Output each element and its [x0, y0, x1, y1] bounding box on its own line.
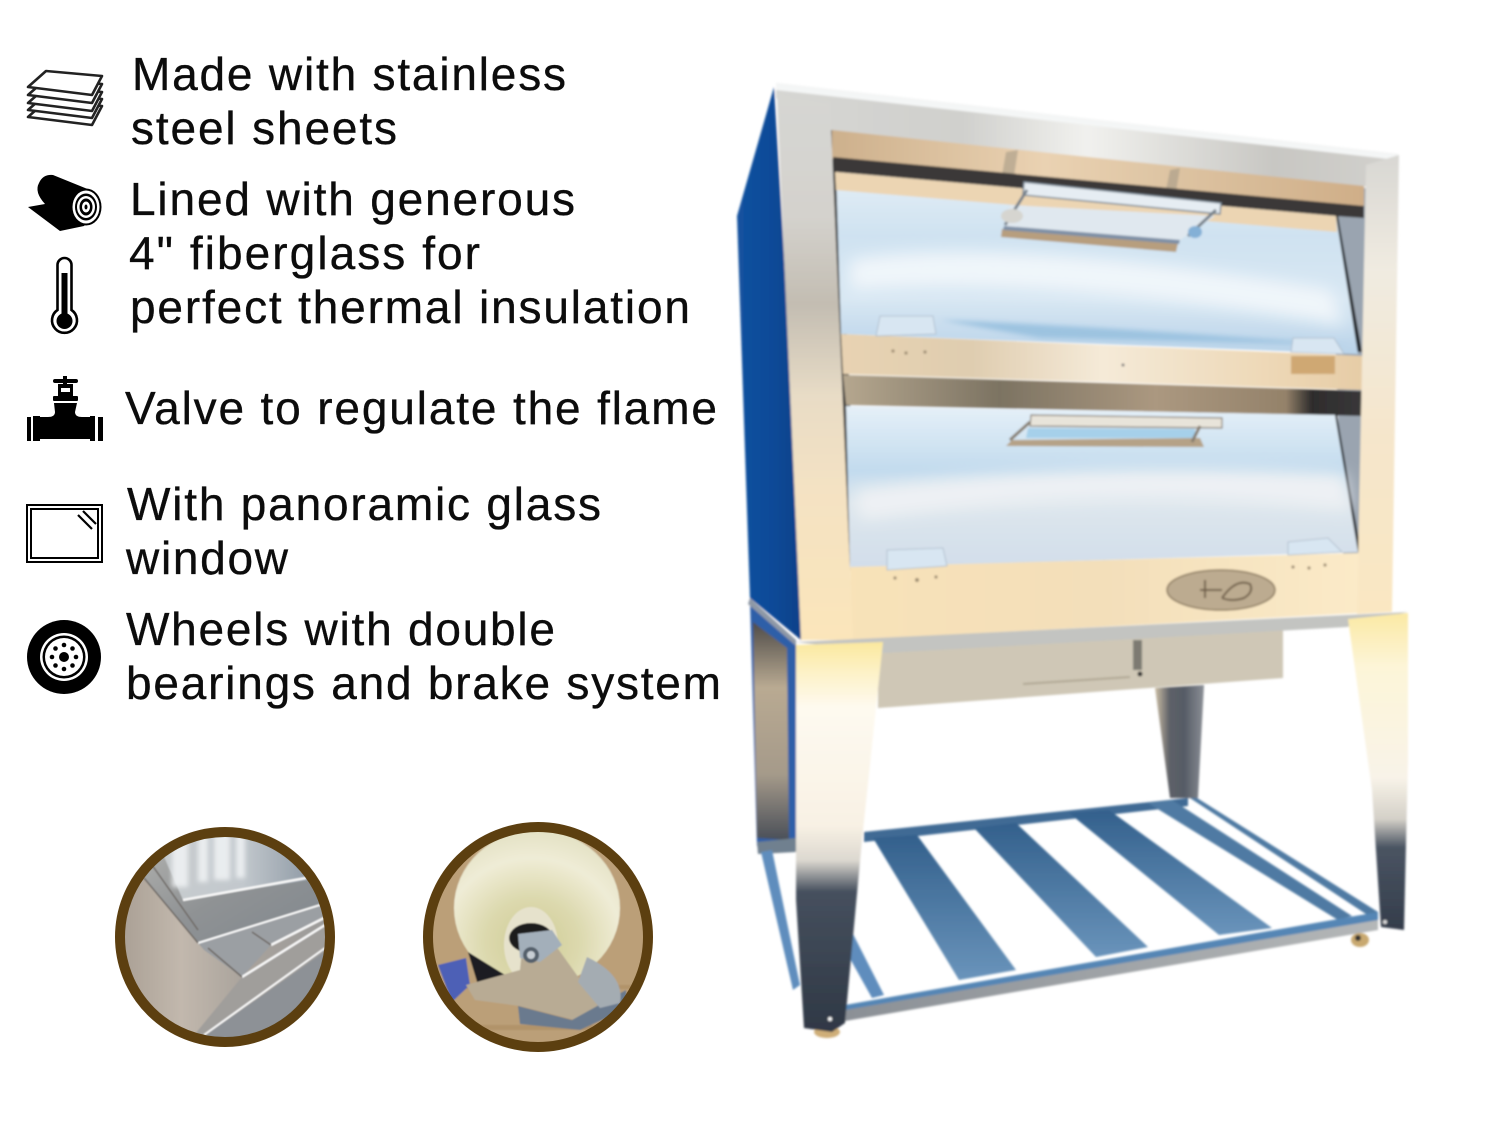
handle: upper door: [1001, 182, 1221, 252]
oven: lower door: [846, 406, 1358, 568]
oven: logo plate: [1167, 570, 1275, 610]
oven: blue side panel: [737, 87, 806, 640]
text: panoramic glass window: With panoramic glass: [127, 478, 601, 530]
hinge screws: [891, 349, 1327, 582]
text: wheels: Wheels with double: [126, 603, 555, 655]
photo: steel sheets: [115, 825, 340, 1047]
oven: top band: [776, 83, 1398, 218]
oven: middle bar: [841, 334, 1364, 416]
text: panoramic glass window: window: [125, 532, 289, 584]
oven: left inner shadow: [826, 103, 858, 570]
hinges: upper door: [876, 316, 1344, 354]
text: fiberglass insulation: perfect thermal insulation: [130, 281, 690, 333]
oven: right pillar: [1357, 155, 1399, 614]
icon: insulation roll: [28, 175, 102, 231]
stand: front left leg: [796, 642, 883, 1032]
oven: bottom bar: [850, 553, 1360, 640]
photo: caster wheel: [425, 825, 651, 1051]
caster: left: [814, 1026, 840, 1038]
stand: drawer box: [878, 630, 1283, 708]
text: panoramic glass window: [125, 478, 601, 584]
text: fiberglass insulation: [129, 173, 690, 333]
icon: glass window: [27, 505, 102, 562]
oven illustration: [737, 83, 1408, 1038]
oven: left pillar: [777, 97, 853, 640]
text: wheels: bearings and brake system: [126, 657, 721, 709]
stand: rear leg: [1155, 685, 1204, 798]
icon: wheel: [27, 620, 101, 694]
caster: right: [1351, 933, 1369, 947]
stand: front right leg: [1348, 613, 1408, 930]
text: fiberglass insulation: Lined with generous: [130, 173, 575, 225]
hinges: lower door: [887, 538, 1342, 570]
text: fiberglass insulation: 4" fiberglass for: [129, 227, 480, 279]
feature list: [125, 48, 721, 709]
stand: left rear leg: [750, 600, 796, 854]
stand: top rail: [748, 598, 1408, 653]
text: valve: Valve to regulate the flame: [125, 382, 717, 434]
text: stainless steel sheets: [131, 48, 566, 154]
text: wheels: [126, 603, 721, 709]
text: stainless steel sheets: Made with stainless: [132, 48, 566, 100]
icon: thermometer: [52, 258, 77, 333]
icon: stacked sheets: [28, 71, 102, 125]
oven: upper door: [835, 172, 1358, 354]
text: stainless steel sheets: steel sheets: [131, 102, 397, 154]
oven: right inner shadow: [1330, 188, 1366, 612]
icon: valve: [27, 376, 103, 441]
handle: lower door: [1006, 415, 1222, 447]
stand: lower shelf: [761, 798, 1378, 1038]
